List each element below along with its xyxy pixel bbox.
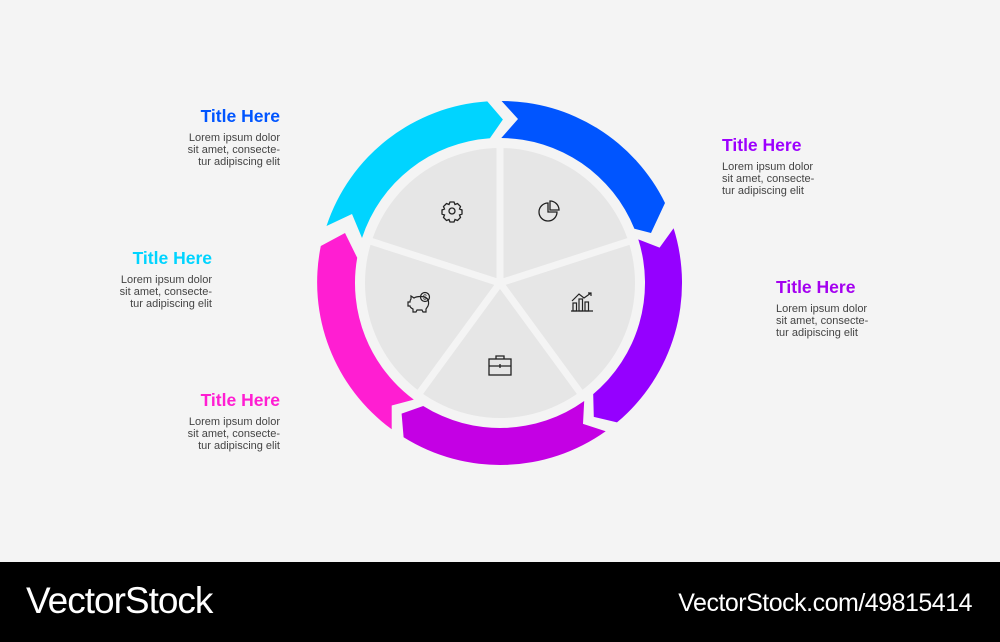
text block: bottom-left	[188, 390, 280, 452]
arrow: magenta-purple	[402, 401, 606, 465]
footer url: VectorStock.com/49815414	[678, 589, 972, 617]
text block: middle-right: tur adipiscing elit	[776, 327, 858, 339]
text block: top-left: Title Here	[201, 106, 280, 126]
icon: pie chart	[539, 201, 559, 221]
text block: top-right: sit amet, consecte-	[722, 173, 814, 185]
text block: top-right	[722, 135, 814, 197]
text block: bottom-left: sit amet, consecte-	[188, 428, 280, 440]
text block: bottom-left: Lorem ipsum dolor	[189, 416, 280, 428]
text block: middle-left: Lorem ipsum dolor	[121, 274, 212, 286]
text block: top-right: Title Here	[722, 135, 801, 155]
text block: middle-right: Title Here	[776, 277, 855, 297]
text block: middle-left	[120, 248, 212, 310]
icon: growth chart	[571, 293, 593, 311]
arrow: blue	[501, 101, 665, 233]
text block: middle-left: Title Here	[133, 248, 212, 268]
text block: top-left	[188, 106, 280, 168]
text block: top-left: sit amet, consecte-	[188, 144, 280, 156]
pie: five segments	[365, 145, 635, 418]
text block: bottom-left: tur adipiscing elit	[198, 440, 280, 452]
text block: top-left: Lorem ipsum dolor	[189, 132, 280, 144]
text block: top-left: tur adipiscing elit	[198, 156, 280, 168]
text block: top-right: Lorem ipsum dolor	[722, 161, 813, 173]
text block: top-right: tur adipiscing elit	[722, 185, 804, 197]
footer bar	[0, 562, 1000, 642]
text block: middle-right: sit amet, consecte-	[776, 315, 868, 327]
icon: piggy bank: $	[423, 294, 427, 302]
arrow: purple	[593, 228, 682, 422]
icon: gear	[442, 202, 462, 222]
icon: piggy bank	[408, 292, 430, 312]
text block: middle-left: tur adipiscing elit	[130, 298, 212, 310]
arrow: cyan	[326, 101, 503, 238]
text block: middle-left: sit amet, consecte-	[120, 286, 212, 298]
icon: briefcase	[489, 356, 511, 375]
footer logo: VectorStock	[26, 580, 212, 621]
text block: middle-right: Lorem ipsum dolor	[776, 303, 867, 315]
text block: middle-right	[776, 277, 868, 339]
arrow: pink	[317, 233, 414, 429]
text block: bottom-left: Title Here	[201, 390, 280, 410]
